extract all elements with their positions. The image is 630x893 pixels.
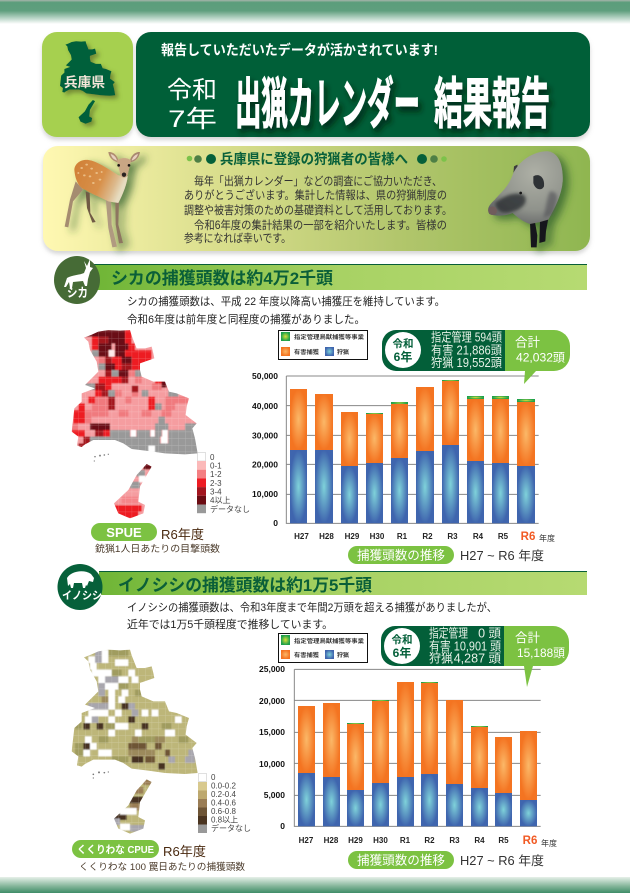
- y axis labels: 0: [273, 518, 278, 528]
- top gradient band: [0, 0, 630, 24]
- x axis labels: H30: [373, 836, 388, 845]
- x axis labels: R4: [473, 532, 484, 541]
- callout: boar R6 totals: [381, 626, 569, 687]
- chart caption: deer: 捕獲頭数の推移: [357, 548, 445, 562]
- y axis labels: [259, 664, 285, 831]
- callout: boar R6 totals: 狩猟: [429, 652, 453, 666]
- chart caption: boar: 捕獲頭数の推移: [357, 852, 445, 868]
- map legend: deer: 2-3: [210, 479, 222, 488]
- islands: [92, 771, 109, 779]
- greeting body text: 令和6年度の集計結果の一部を紹介いたします。皆様の: [194, 218, 447, 232]
- chart legend: boar: 指定管理鳥獣捕獲等事業: [294, 637, 365, 645]
- x axis labels: R4: [474, 836, 485, 845]
- y axis labels: [252, 371, 278, 528]
- y axis labels: 20,000: [252, 460, 278, 470]
- x axis labels: H29: [345, 532, 360, 541]
- map legend: deer: 1-2: [210, 470, 222, 479]
- x axis labels: [294, 531, 555, 543]
- y axis labels: 0: [280, 821, 285, 831]
- chart caption: deer: [348, 546, 544, 564]
- map caption: SPUE: R6年度: [161, 527, 204, 542]
- callout: deer R6 totals: 指定管理 594頭: [431, 330, 502, 344]
- y axis labels: 5,000: [264, 790, 285, 800]
- y axis labels: 40,000: [252, 401, 278, 411]
- map caption: CPUE: R6年度: [163, 844, 206, 859]
- chart caption: boar: H27 ~ R6 年度: [460, 853, 544, 868]
- chart legend: boar: [278, 634, 368, 662]
- chart legend: deer: 狩猟: [337, 348, 350, 356]
- callout: deer R6 totals: 6年: [394, 349, 412, 364]
- map legend: deer: [197, 452, 250, 514]
- Awaji cells: [142, 464, 152, 470]
- x axis labels: R5: [498, 836, 509, 845]
- icon: deer badge: シカ: [67, 286, 88, 300]
- label: Hyogo: 兵庫県: [64, 74, 106, 90]
- x axis labels: R1: [400, 836, 411, 845]
- callout: deer R6 totals: 令和: [392, 337, 414, 350]
- text: boar summary: イノシシの捕獲頭数は、令和3年度まで年間2万頭を超える捕獲がありましたが、: [127, 600, 497, 614]
- chart legend: deer: [278, 330, 368, 360]
- map caption: SPUE: 銃猟1人日あたりの目撃頭数: [95, 543, 221, 555]
- callout: deer R6 totals: [382, 330, 570, 384]
- chart legend: deer: 有害捕獲: [294, 348, 320, 356]
- Awaji cells: [130, 782, 152, 807]
- y axis labels: 10,000: [259, 759, 285, 769]
- greeting heading: 兵庫県に登録の狩猟者の皆様へ: [220, 151, 408, 167]
- era label: 令和: [167, 77, 217, 104]
- map caption: CPUE: [72, 840, 245, 873]
- text: boar summary: 近年では1万5千頭程度で推移しています。: [127, 617, 333, 631]
- bar chart: deer captures: [252, 371, 555, 543]
- map legend: boar: 0.0-0.2: [211, 782, 236, 790]
- x axis labels: R6: [521, 531, 535, 543]
- map legend: deer: 0: [210, 453, 215, 462]
- icon: boar badge: [58, 564, 102, 610]
- x axis labels: [299, 835, 557, 848]
- panel: greeting: [43, 146, 590, 251]
- chart caption: boar: [348, 851, 544, 869]
- panel: Hyogo prefecture badge: [42, 32, 133, 137]
- x axis labels: H27: [294, 532, 309, 541]
- map legend: boar: 0.2-0.4: [211, 790, 236, 799]
- map legend: deer: 4以上: [210, 496, 230, 505]
- x axis labels: H27: [299, 836, 314, 845]
- x axis labels: 年度: [541, 838, 557, 848]
- icon: Hyogo map: [60, 41, 115, 124]
- callout: deer R6 totals: 有害 21,886頭: [431, 342, 502, 358]
- x axis labels: H29: [348, 836, 363, 845]
- callout: deer R6 totals: 合計: [515, 334, 541, 350]
- greeting body text: 参考になれば幸いです。: [184, 232, 291, 245]
- section header: boar: [58, 564, 587, 610]
- y axis labels: 15,000: [259, 727, 285, 737]
- era label: 7年: [168, 106, 217, 133]
- map: boar CPUE: [72, 650, 198, 834]
- map legend: deer: データなし: [210, 504, 250, 514]
- callout: boar R6 totals: 令和: [392, 633, 412, 646]
- x axis labels: R2: [424, 836, 435, 845]
- x axis labels: R3: [449, 836, 460, 845]
- map caption: CPUE: くくりわな CPUE: [77, 844, 154, 856]
- callout: deer R6 totals: 42,032頭: [516, 350, 565, 364]
- chart legend: deer: 指定管理鳥獣捕獲等事業: [294, 333, 365, 341]
- y axis labels: 25,000: [259, 664, 285, 674]
- bottom gradient band: [0, 877, 630, 893]
- photo: deer: [65, 152, 140, 247]
- plot: [286, 376, 539, 523]
- era label: [167, 77, 217, 133]
- map legend: boar: 0.4-0.6: [211, 798, 236, 808]
- chart legend: boar: 狩猟: [337, 651, 350, 659]
- x axis labels: R5: [498, 532, 509, 541]
- callout: boar R6 totals: 合計: [515, 630, 541, 645]
- islands: [94, 454, 109, 462]
- map legend: boar: [198, 773, 251, 833]
- x axis labels: H28: [319, 532, 334, 541]
- map caption: CPUE: くくりわな 100 罠日あたりの捕獲頭数: [79, 861, 245, 873]
- map legend: boar: 0.6-0.8: [211, 807, 236, 816]
- map legend: boar: 0: [211, 773, 216, 782]
- icon: boar badge: イノシシ: [62, 589, 102, 602]
- map: deer SPUE: [68, 327, 202, 523]
- main title: 出猟カレンダー: [235, 73, 420, 135]
- map legend: boar: 0.8以上: [211, 816, 238, 824]
- text: deer summary: シカの捕獲頭数は、平成 22 年度以降高い捕獲圧を維持しています。: [127, 294, 445, 308]
- panel: title banner: [136, 32, 590, 137]
- callout: boar R6 totals: 6年: [393, 645, 411, 660]
- y axis labels: 50,000: [252, 371, 278, 381]
- greeting body text: 毎年「出猟カレンダー」などの調査にご協力いただき、: [194, 174, 442, 188]
- x axis labels: R2: [422, 532, 433, 541]
- callout: boar R6 totals: 有害 10,901 頭: [429, 638, 501, 654]
- callout: boar R6 totals: 指定管理: [429, 626, 468, 640]
- chart legend: boar: 有害捕獲: [294, 651, 320, 659]
- map legend: deer: 0-1: [210, 462, 222, 470]
- x axis labels: 年度: [539, 533, 555, 543]
- callout: boar R6 totals: 15,188頭: [517, 646, 565, 660]
- icon: deer badge: [54, 256, 100, 304]
- text: boar summary: [127, 600, 497, 631]
- photo: wild boar: [488, 151, 563, 247]
- map legend: deer: 3-4: [210, 488, 222, 496]
- x axis labels: H30: [370, 532, 385, 541]
- greeting body text: ありがとうございます。集計した情報は、県の狩猟制度の: [184, 188, 447, 202]
- text: deer summary: [127, 294, 445, 326]
- subtitle: 報告していただいたデータが活かされています!: [161, 42, 438, 58]
- x axis labels: R1: [397, 532, 408, 541]
- y axis labels: 30,000: [252, 430, 278, 440]
- chart caption: deer: H27 ~ R6 年度: [460, 548, 544, 563]
- x axis labels: R3: [447, 532, 458, 541]
- map caption: SPUE: [91, 523, 221, 555]
- callout: deer R6 totals: 狩猟 19,552頭: [431, 356, 502, 370]
- plot: [294, 669, 541, 826]
- map caption: SPUE: SPUE: [106, 525, 142, 540]
- text: deer summary: 令和6年度は前年度と同程度の捕獲がありました。: [127, 312, 365, 326]
- y axis labels: 20,000: [259, 696, 285, 706]
- section heading: boar: イノシシの捕獲頭数は約1万5千頭: [118, 575, 372, 595]
- section heading: deer: シカの捕獲頭数は約4万2千頭: [111, 268, 333, 288]
- greeting body text: 調整や被害対策のための基礎資料として活用しております。: [184, 203, 452, 217]
- y axis labels: 10,000: [252, 489, 278, 499]
- x axis labels: R6: [523, 835, 537, 847]
- bar chart: boar captures: [259, 664, 557, 848]
- callout: boar R6 totals: 4,287 頭: [454, 652, 501, 666]
- section header: deer: [54, 256, 587, 304]
- x axis labels: H28: [324, 836, 339, 845]
- map legend: boar: データなし: [211, 823, 251, 833]
- callout: boar R6 totals: 0 頭: [478, 626, 501, 640]
- greeting body text: [184, 174, 452, 245]
